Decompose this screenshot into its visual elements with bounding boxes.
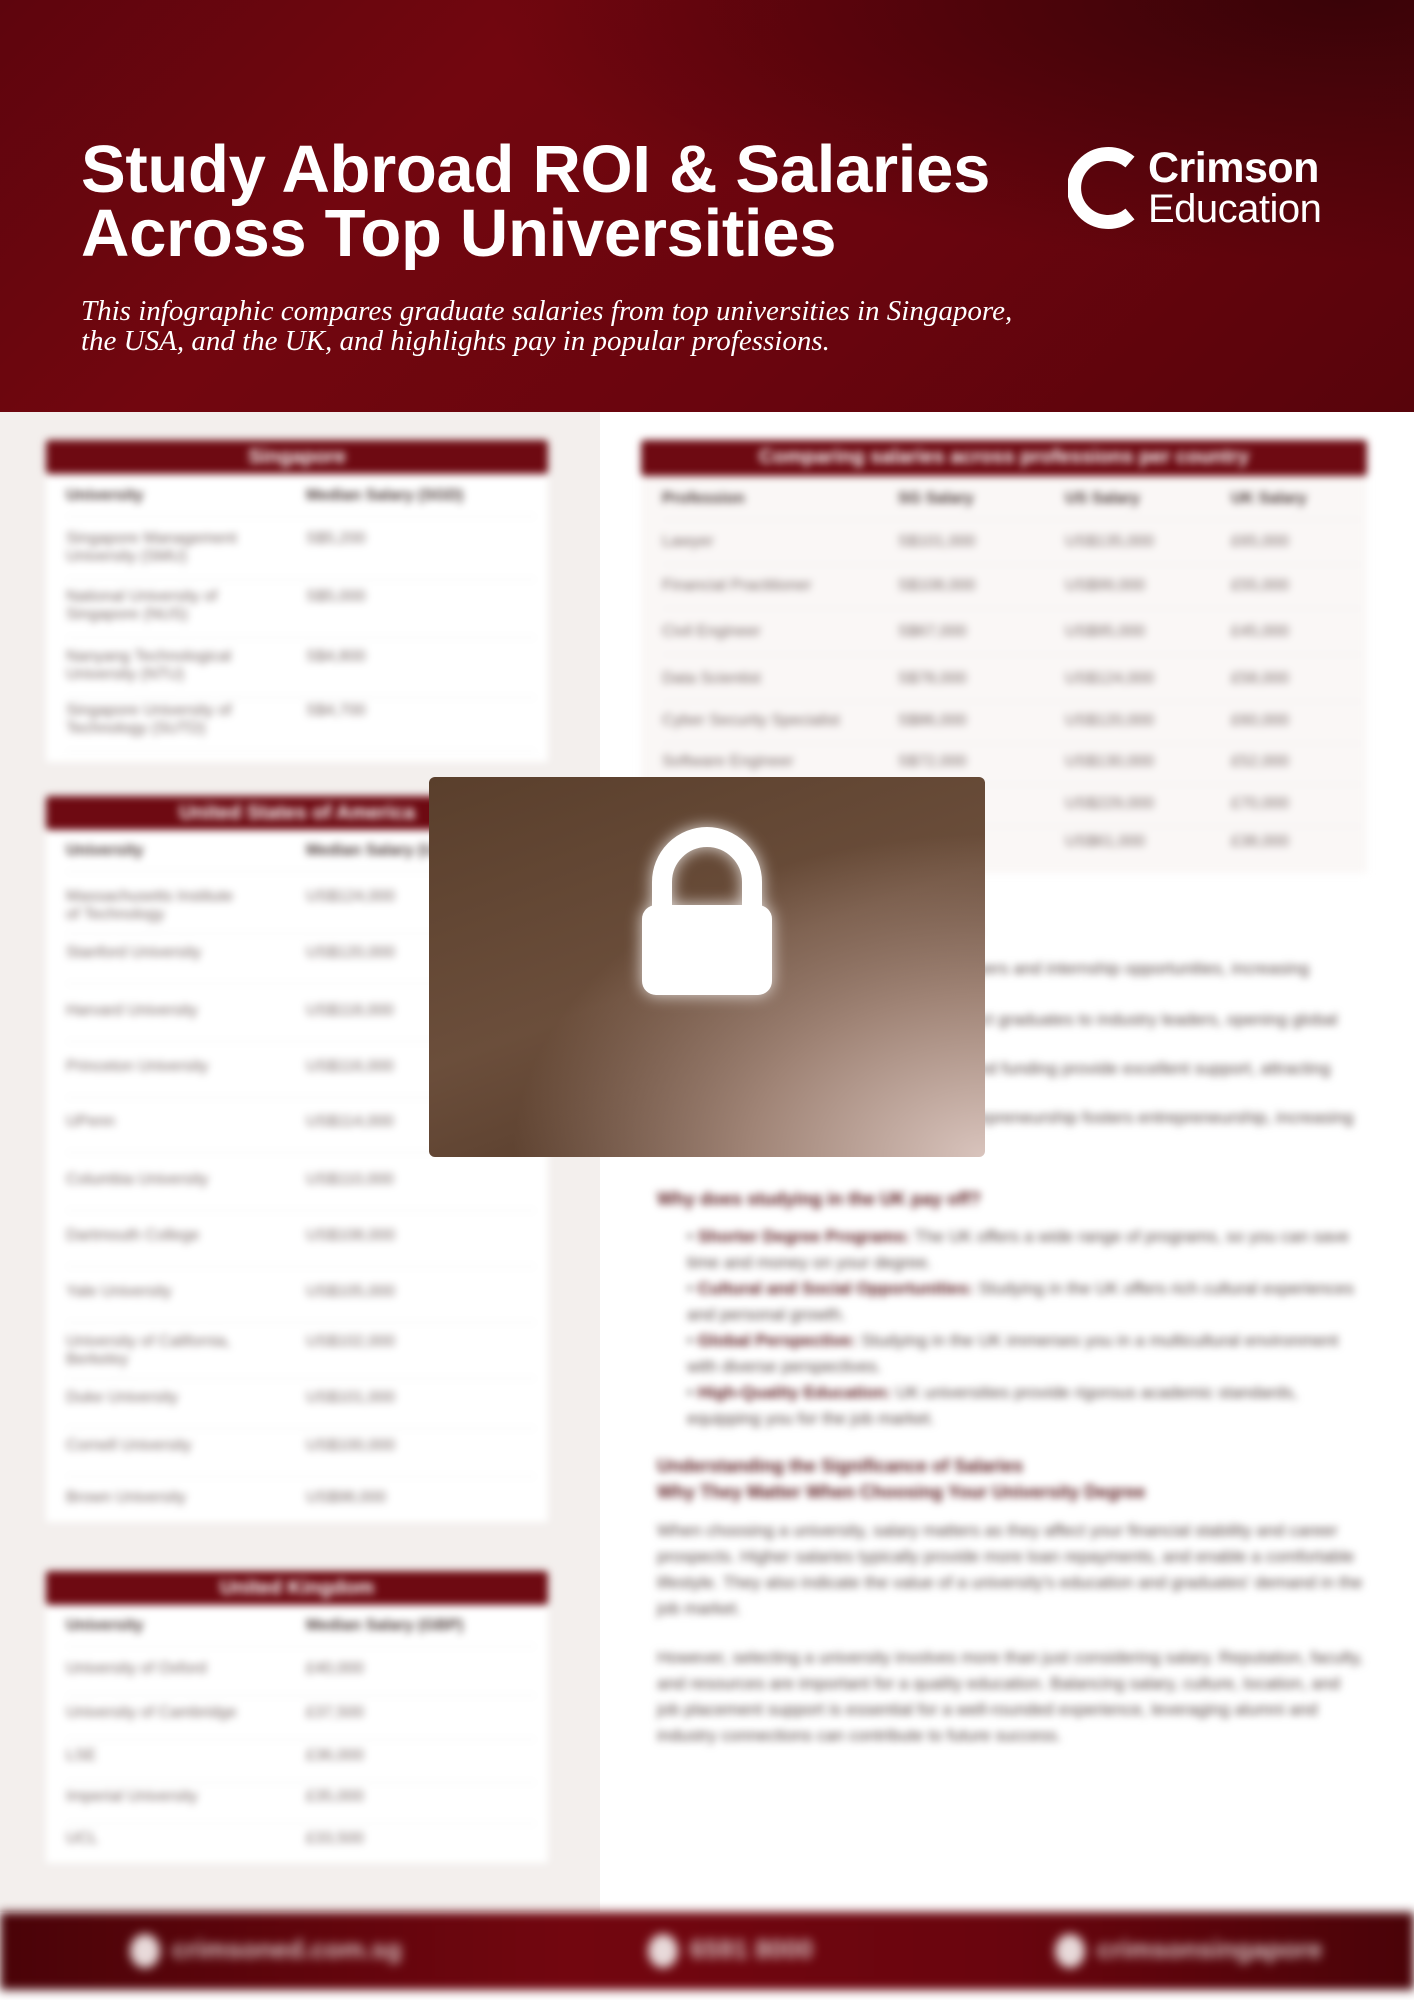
- footer: phone: 6591 8000: [690, 1934, 813, 1964]
- panel: professions table: Software Engineer: [662, 753, 794, 770]
- text: right column body: • Shorter Degree Programs: The UK offers a wide range of programs, so you can save time and money on your degree.: [687, 1227, 1349, 1272]
- panel: university tables: University: [66, 842, 143, 859]
- panel: university tables: Technology (SUTD): [66, 720, 206, 737]
- footer: [0, 1912, 1414, 1990]
- panel: university tables: US$108,000: [306, 1227, 395, 1244]
- panel: professions table: £38,000: [1231, 833, 1289, 850]
- panel: professions table: S$86,000: [898, 712, 967, 729]
- panel: professions table: US$99,000: [1065, 577, 1145, 594]
- text: right column body: Why does studying in the UK pay off?: [657, 1189, 981, 1209]
- text: right column body: Understanding the Significance of Salaries: [657, 1456, 1023, 1476]
- panel: professions table: US Salary: [1065, 490, 1140, 507]
- panel: professions table: £70,000: [1231, 795, 1289, 812]
- text: right column body: Why does studying in the US pay off?: [657, 925, 980, 945]
- footer: phone: [640, 1926, 819, 1976]
- panel: university tables: [39, 433, 555, 1863]
- panel: university tables: £33,500: [306, 1830, 364, 1847]
- panel: university tables: S$5,200: [306, 530, 366, 547]
- panel: university tables: US$98,000: [306, 1489, 386, 1506]
- panel: university tables: US$101,000: [306, 1389, 395, 1406]
- panel: university tables: S$5,000: [306, 588, 366, 605]
- panel: university tables: Singapore (NUS): [66, 606, 188, 623]
- panel: university tables: £35,000: [306, 1788, 364, 1805]
- subtitle: the USA, and the UK, and highlights pay in popular professions.: [81, 325, 830, 357]
- panel: university tables: S$4,700: [306, 702, 366, 719]
- panel: professions table: [634, 433, 1374, 868]
- icon: padlock: [630, 816, 784, 1007]
- text: right column body: Why They Matter When Choosing Your University Degree: [657, 1482, 1145, 1502]
- panel: university tables: US$105,000: [306, 1283, 395, 1300]
- left panel background: [0, 412, 600, 1912]
- panel: professions table: US$130,000: [1065, 753, 1154, 770]
- panel: university tables: Nanyang Technological: [66, 648, 231, 665]
- title: [81, 132, 990, 271]
- panel: university tables: University: [66, 1617, 143, 1634]
- panel: university tables: S$4,800: [306, 648, 366, 665]
- panel: university tables: United Kingdom: [220, 1577, 374, 1599]
- panel: professions table: US$229,000: [1065, 795, 1154, 812]
- panel: university tables: £40,000: [306, 1660, 364, 1677]
- panel: university tables: University (NTU): [66, 666, 184, 683]
- panel: professions table: US$61,000: [1065, 833, 1145, 850]
- text: right column body: Career Opportunities: Access to top employers and internship opportunities, increasing chances: [657, 959, 1309, 1004]
- text: right column body: Research: World-class research facilities and funding provide excellent support, attracting: [657, 1059, 1330, 1078]
- header: [0, 0, 1414, 412]
- text: right column body: • High-Quality Education: UK universities provide rigorous academic standards, equipping you for the job market.: [687, 1383, 1298, 1428]
- panel: professions table: Cyber Security Specialist: [662, 712, 840, 729]
- panel: university tables: US$114,000: [306, 1113, 394, 1130]
- panel: professions table: Doctor: [662, 795, 709, 812]
- panel: university tables: UCL: [66, 1830, 98, 1847]
- panel: university tables: Columbia University: [66, 1171, 208, 1188]
- panel: professions table: S$48,000: [898, 833, 967, 850]
- panel: university tables: of Technology: [66, 906, 164, 923]
- title: Study Abroad ROI & Salaries: [81, 132, 990, 207]
- panel: university tables: UPenn: [66, 1113, 115, 1130]
- panel: university tables: Berkeley: [66, 1351, 128, 1368]
- panel: professions table: Financial Practitioner: [662, 577, 811, 594]
- panel: professions table: £58,000: [1231, 670, 1289, 687]
- panel: professions table: S$78,000: [898, 670, 967, 687]
- panel: university tables: Singapore Management: [66, 530, 237, 547]
- panel: professions table: S$72,000: [898, 753, 967, 770]
- footer: website: crimsoned.com.sg: [172, 1934, 402, 1964]
- panel: university tables: Brown University: [66, 1489, 186, 1506]
- panel: university tables: National University of: [66, 588, 217, 605]
- panel: professions table: S$67,000: [898, 623, 967, 640]
- panel: university tables: US$124,000: [306, 888, 395, 905]
- panel: university tables: US$116,000: [306, 1058, 394, 1075]
- text: right column body: • Cultural and Social Opportunities: Studying in the UK offers rich cultural experiences and personal growth.: [687, 1279, 1354, 1324]
- panel: professions table: Lawyer: [662, 533, 714, 550]
- lock overlay: [429, 777, 985, 1157]
- panel: professions table: S$120,000: [898, 795, 975, 812]
- panel: professions table: SG Salary: [898, 490, 974, 507]
- logo: Crimson Education: Education: [1148, 187, 1321, 231]
- panel: professions table: £55,000: [1231, 577, 1289, 594]
- panel: university tables: Singapore: [248, 446, 346, 468]
- panel: university tables: Cornell University: [66, 1437, 191, 1454]
- panel: professions table: £45,000: [1231, 623, 1289, 640]
- footer: website: [122, 1926, 408, 1976]
- panel: university tables: University (SMU): [66, 548, 187, 565]
- panel: university tables: Yale University: [66, 1283, 172, 1300]
- text: right column body: However, selecting a university involves more than just considering salary. Reputation, faculty, and resources are important for a quality education. Balancing salary, culture, location, and job placement support is essential for a well-rounded experience, leveraging alumni and industry connections can contribute to future success.: [657, 1648, 1363, 1745]
- panel: professions table: Teacher: [662, 833, 719, 850]
- panel: professions table: UK Salary: [1231, 490, 1307, 507]
- text: right column body: Innovation: A culture of innovation and entrepreneurship fosters entrepreneurship, increasing: [657, 1108, 1354, 1127]
- panel: university tables: £37,500: [306, 1704, 364, 1721]
- title: Across Top Universities: [81, 196, 836, 271]
- panel: university tables: University: [66, 487, 143, 504]
- panel: university tables: Median Salary (USD): [306, 842, 462, 859]
- panel: professions table: £65,000: [1231, 533, 1289, 550]
- text: right column body: Networking: Strong alumni networks connect graduates to industry leaders, opening global: [657, 1010, 1337, 1029]
- logo: Crimson Education: [1068, 144, 1321, 231]
- panel: university tables: Massachusetts Institute: [66, 888, 233, 905]
- panel: university tables: University of Oxford: [66, 1660, 206, 1677]
- panel: professions table: US$120,000: [1065, 712, 1154, 729]
- panel: university tables: Princeton University: [66, 1058, 208, 1075]
- panel: university tables: Dartmouth College: [66, 1227, 199, 1244]
- footer: social: crimsonsingapore: [1097, 1934, 1322, 1964]
- panel: university tables: £36,000: [306, 1747, 364, 1764]
- text: right column body: • Global Perspective: Studying in the UK immerses you in a multicultural environment with diverse perspectives.: [687, 1331, 1338, 1376]
- panel: university tables: US$120,000: [306, 944, 395, 961]
- panel: professions table: S$108,000: [898, 577, 975, 594]
- panel: university tables: US$100,000: [306, 1437, 395, 1454]
- panel: university tables: University of Cambridge: [66, 1704, 237, 1721]
- panel: university tables: Singapore University of: [66, 702, 231, 719]
- panel: university tables: Median Salary (GBP): [306, 1617, 463, 1634]
- panel: university tables: US$118,000: [306, 1002, 394, 1019]
- panel: professions table: Comparing salaries across professions per country: [759, 446, 1249, 468]
- logo: Crimson Education: Crimson: [1148, 144, 1319, 192]
- subtitle: This infographic compares graduate salaries from top universities in Singapore,: [81, 295, 1012, 327]
- panel: professions table: S$101,000: [898, 533, 975, 550]
- panel: university tables: US$102,000: [306, 1333, 395, 1350]
- panel: professions table: US$135,000: [1065, 533, 1154, 550]
- subtitle: [81, 295, 1012, 357]
- footer: social: [1047, 1926, 1328, 1976]
- panel: university tables: LSE: [66, 1747, 96, 1764]
- panel: university tables: US$110,000: [306, 1171, 394, 1188]
- panel: professions table: US$95,000: [1065, 623, 1145, 640]
- panel: professions table: Profession: [662, 490, 745, 507]
- panel: university tables: University of California,: [66, 1333, 230, 1350]
- text: right column body: When choosing a university, salary matters as they affect your financial stability and career prospects. Higher salaries typically provide more loan repayments, and enable a comfortable lifestyle. They also indicate the value of a university's education and graduates' demand in the job market.: [657, 1521, 1362, 1618]
- panel: professions table: £60,000: [1231, 712, 1289, 729]
- panel: professions table: Civil Engineer: [662, 623, 761, 640]
- panel: university tables: Median Salary (SGD): [306, 487, 463, 504]
- panel: professions table: Data Scientist: [662, 670, 761, 687]
- panel: university tables: Stanford University: [66, 944, 201, 961]
- panel: university tables: Imperial University: [66, 1788, 198, 1805]
- panel: university tables: Harvard University: [66, 1002, 198, 1019]
- panel: university tables: Duke University: [66, 1389, 178, 1406]
- panel: professions table: US$124,000: [1065, 670, 1154, 687]
- panel: professions table: £52,000: [1231, 753, 1289, 770]
- panel: university tables: United States of America: [179, 802, 415, 824]
